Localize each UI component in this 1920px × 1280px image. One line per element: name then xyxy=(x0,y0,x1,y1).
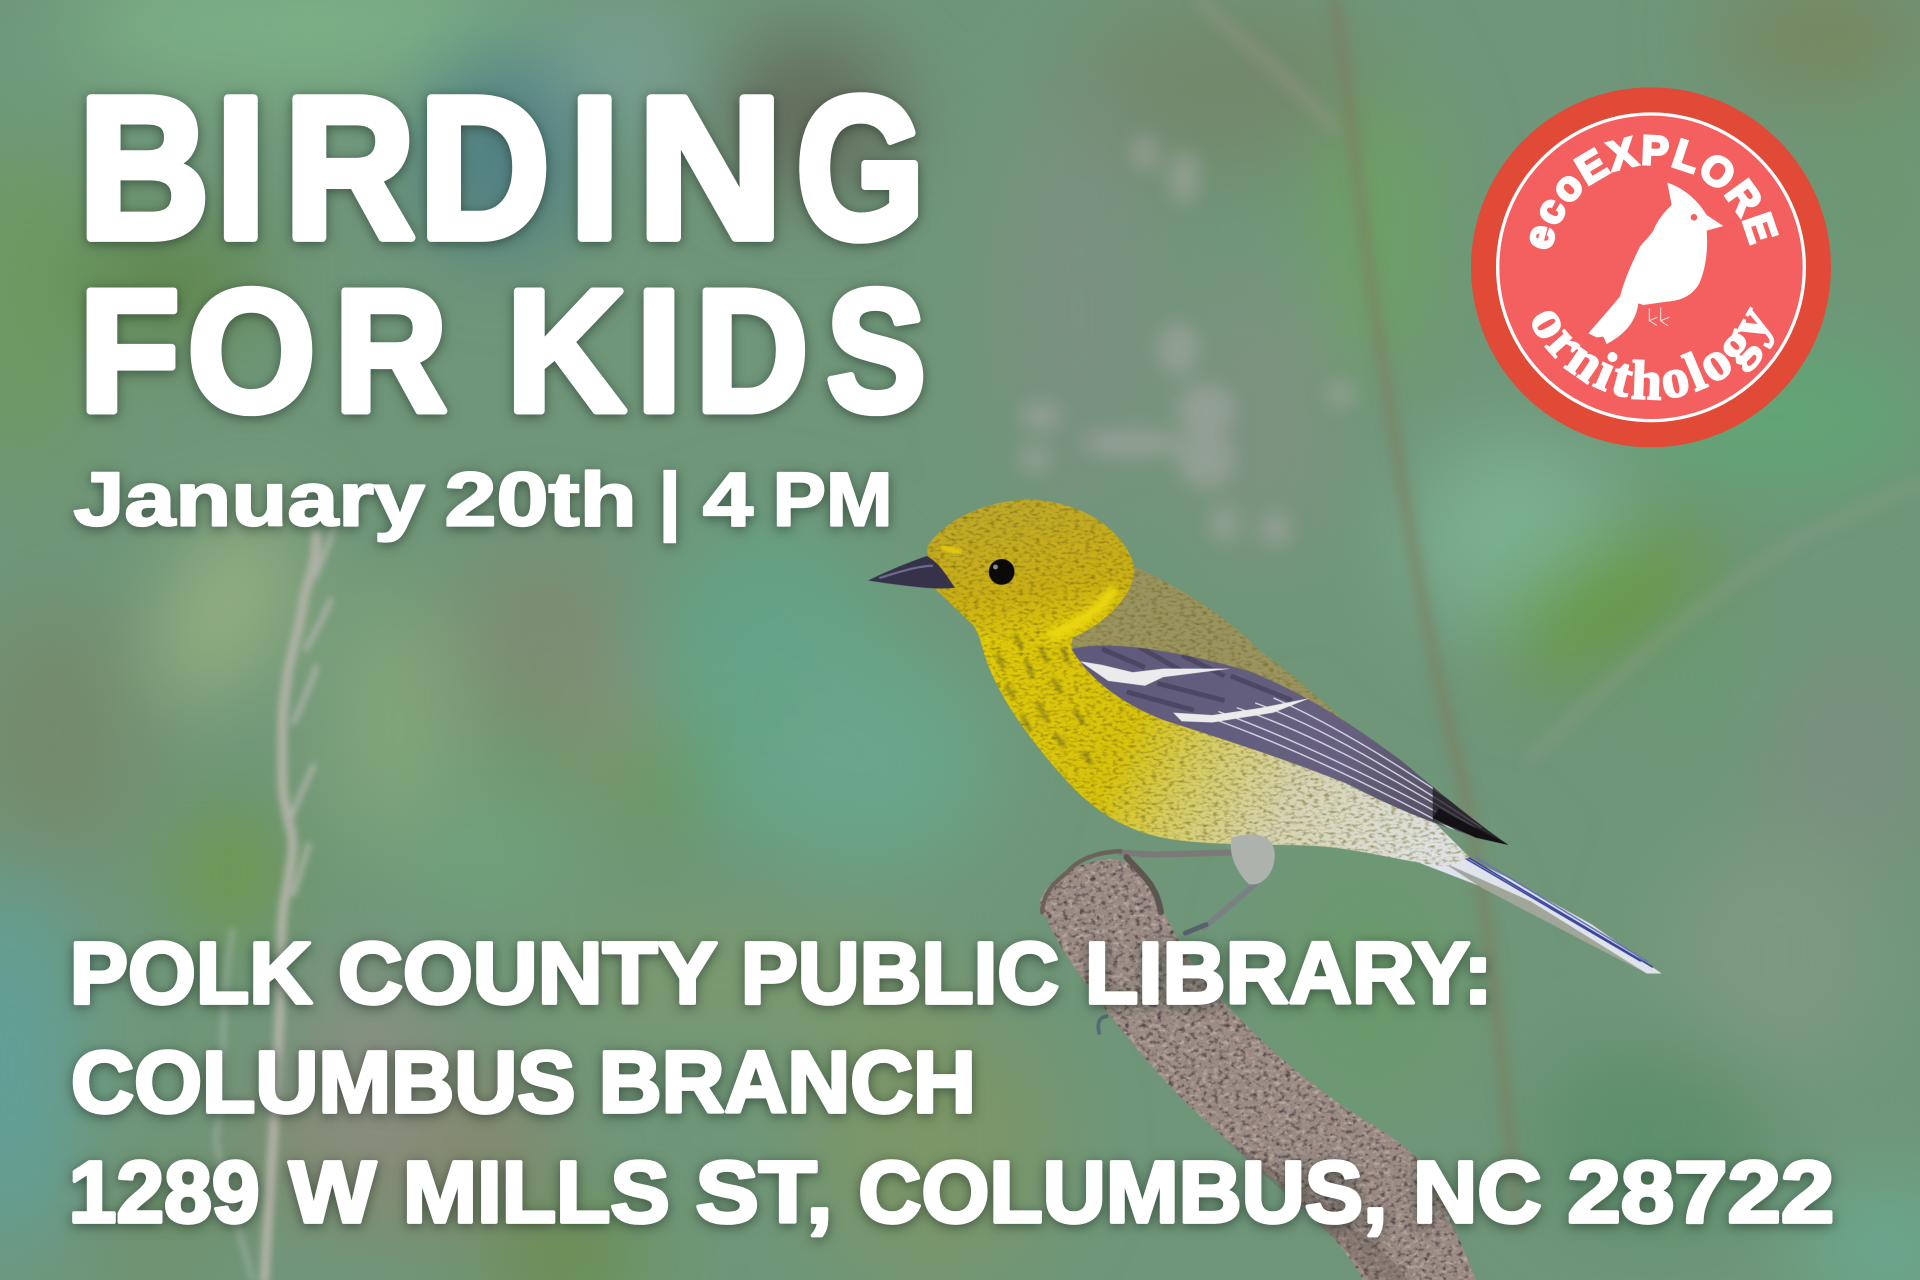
tail xyxy=(1420,839,1662,973)
date and time: PM xyxy=(773,457,893,542)
breast streaks xyxy=(998,637,1091,763)
blurred seed heads xyxy=(1019,135,1354,546)
location and address: COLUMBUS, xyxy=(858,1144,1387,1241)
beak xyxy=(868,556,955,588)
title: FO xyxy=(79,253,316,448)
body xyxy=(931,539,1469,867)
head xyxy=(927,500,1134,644)
date and time: January xyxy=(73,457,425,542)
location and address: W xyxy=(289,1144,376,1241)
back xyxy=(1071,566,1400,771)
location and address: LIBRARY: xyxy=(1085,925,1493,1022)
date and time: 20th xyxy=(444,457,637,542)
location and address: COLUMBUS xyxy=(71,1034,576,1131)
date and time: | xyxy=(658,457,682,543)
wing xyxy=(1071,646,1509,845)
title: S xyxy=(826,254,926,448)
location and address: MILLS xyxy=(403,1144,670,1241)
neck highlight xyxy=(1053,593,1112,634)
badge text: ecoEXPLORE: ecoEXPLORE xyxy=(1530,134,1779,250)
eye xyxy=(989,559,1014,585)
title: N xyxy=(637,55,783,281)
right stems xyxy=(1200,0,1920,1224)
location and address: ST, xyxy=(696,1144,833,1241)
date and time: 4 xyxy=(703,457,753,542)
badge text: ornithology: ornithology xyxy=(1532,306,1774,400)
location and address: 1289 xyxy=(69,1144,260,1241)
bird: pine warbler xyxy=(868,500,1662,973)
icon: cardinal xyxy=(1588,183,1723,344)
leg xyxy=(1042,851,1255,933)
location and address: BRANCH xyxy=(599,1034,976,1131)
location and address: POLK xyxy=(70,925,312,1022)
title xyxy=(78,55,926,449)
location and address: NC xyxy=(1413,1144,1542,1241)
date and time xyxy=(73,457,893,543)
ecoEXPLORE ornithology badge xyxy=(1471,88,1831,448)
location and address: COUNTY xyxy=(338,925,718,1022)
branch xyxy=(1040,859,1476,1280)
location and address xyxy=(69,925,1834,1241)
title: D xyxy=(695,254,808,449)
title: BIRDI xyxy=(78,55,620,281)
wing bars xyxy=(1080,661,1310,722)
wing feathers xyxy=(1102,647,1518,851)
location and address: 28722 xyxy=(1567,1144,1834,1241)
title: G xyxy=(796,56,925,281)
title: KI xyxy=(506,253,682,448)
title: R xyxy=(334,254,447,449)
left stem xyxy=(216,529,333,1280)
location and address: PUBLIC xyxy=(741,925,1059,1022)
